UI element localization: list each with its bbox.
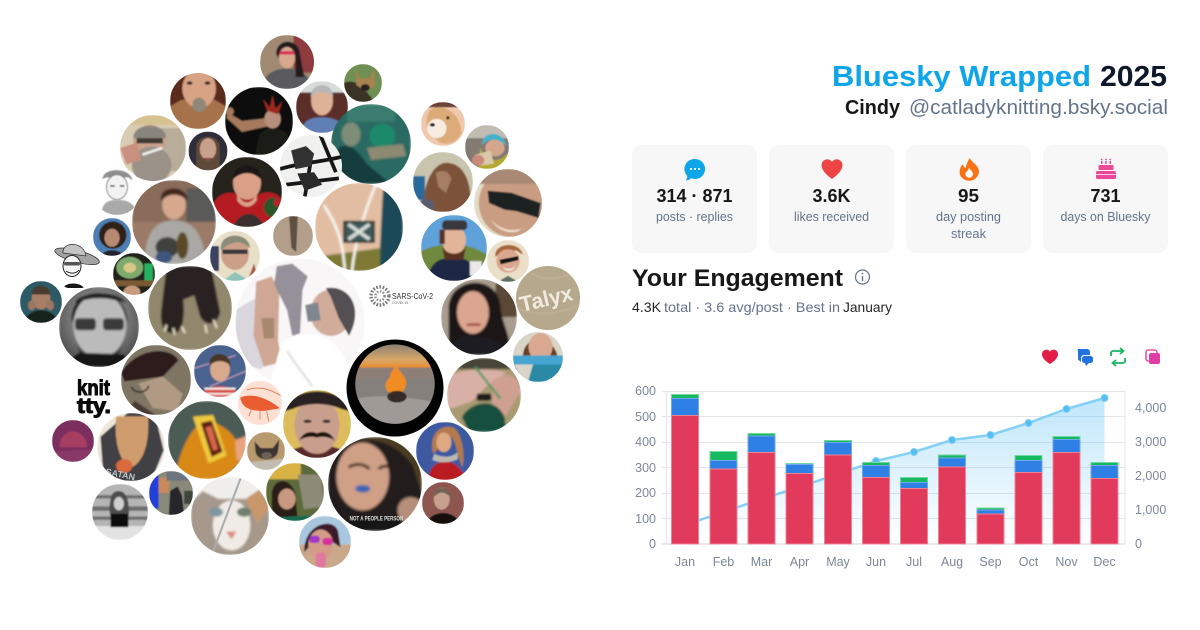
bar: Oct	[1015, 456, 1042, 544]
title: Bluesky Wrapped	[832, 61, 1091, 93]
left axis labels: 600	[635, 384, 656, 398]
legend icons	[1042, 348, 1160, 366]
right axis labels: 4,000	[1135, 401, 1166, 415]
right axis labels: 3,000	[1135, 435, 1166, 449]
panel: likes received	[769, 145, 894, 253]
avatar: knitty logo: knit	[77, 377, 110, 400]
month labels: May	[826, 555, 851, 569]
panel: posts and replies	[632, 145, 757, 253]
stat value: 314 · 871	[656, 186, 732, 206]
right axis labels: 1,000	[1135, 503, 1166, 517]
avatar: long wavy hair	[413, 152, 473, 212]
avatar: roaring cartoon lion	[168, 401, 246, 479]
icon: info	[856, 270, 870, 284]
user name and handle: Cindy	[845, 97, 901, 119]
right axis labels	[1135, 401, 1166, 551]
avatar: woman with glasses	[210, 231, 260, 281]
stat value: 3.6K	[812, 186, 850, 206]
avatar: punk with red mohawk	[225, 87, 293, 155]
month labels: Nov	[1055, 555, 1078, 569]
month labels: Oct	[1019, 555, 1039, 569]
avatar: Talyx logo: Talyx	[517, 280, 575, 317]
month labels: Jan	[675, 555, 695, 569]
avatar: beige knit	[273, 216, 313, 256]
avatar: curly haired woman	[93, 218, 131, 256]
avatar: french bulldog	[247, 432, 285, 470]
avatar: woman with red glasses	[260, 35, 315, 89]
avatar: german shepherd	[344, 64, 382, 102]
cumulative dots	[872, 394, 1108, 464]
icon: reposts arrows	[1111, 348, 1125, 366]
left axis labels	[635, 384, 656, 551]
stat value: 95	[958, 186, 979, 206]
avatar: man with drawn moustache	[283, 390, 351, 458]
avatar: woman with blue lips	[328, 437, 424, 531]
right axis labels: 0	[1135, 537, 1142, 551]
avatar: knitty logo	[77, 377, 111, 418]
avatar: man in dark sweater	[20, 281, 62, 323]
avatar: man with sphynx cat	[236, 258, 364, 388]
avatar: black sunglasses smile	[474, 169, 544, 237]
avatar: small woman on rose background	[422, 482, 464, 524]
avatar: SARS-CoV-2 logo	[371, 287, 433, 305]
month labels: Apr	[790, 555, 809, 569]
avatar cloud	[20, 35, 580, 568]
avatar: woman kissing	[266, 463, 324, 521]
avatar: bearded man with toothbrush	[120, 115, 186, 184]
engagement summary: 4.3K	[632, 299, 662, 315]
y axis grid	[662, 391, 1125, 544]
cumulative line	[685, 398, 1104, 525]
avatar: necklace on skin	[315, 183, 403, 271]
bar: Mar	[748, 434, 775, 544]
icon: heart	[822, 159, 842, 179]
avatar: Talyx logo	[516, 266, 580, 330]
icon: likes heart	[1042, 350, 1058, 364]
avatar: shrimp illustration	[238, 381, 282, 425]
avatar: reflective sunglasses and tongue	[299, 516, 351, 568]
left axis labels: 0	[649, 537, 656, 551]
icon: birthday cake	[1096, 159, 1116, 179]
avatar: heraldic lion crest	[280, 135, 342, 197]
avatar: purple knit hat	[52, 420, 94, 462]
month labels: Mar	[751, 555, 772, 569]
bar: Apr	[786, 464, 813, 544]
engagement summary	[632, 299, 892, 315]
avatar: cat face with knitting needle	[191, 469, 269, 555]
month labels: Feb	[713, 555, 734, 569]
chart: monthly engagement stacked bars with cumulative line	[635, 384, 1166, 569]
month labels	[675, 555, 1116, 569]
avatar: crowd in store	[149, 471, 193, 515]
left axis labels: 500	[635, 410, 656, 424]
avatar: beach bonfire	[346, 340, 444, 436]
avatar: George Takei	[296, 81, 348, 133]
right axis labels: 2,000	[1135, 469, 1166, 483]
left axis labels: 400	[635, 435, 656, 449]
engagement summary: total · 3.6 avg/post · Best in	[664, 299, 840, 315]
avatar: black and white woman	[92, 484, 148, 540]
month labels: Sep	[979, 555, 1002, 569]
avatar: cartoon in hat	[54, 244, 100, 288]
icon: quotes squares	[1146, 350, 1160, 364]
avatar: cat paws	[148, 266, 232, 350]
panel: days on Bluesky	[1043, 145, 1168, 253]
left axis labels: 300	[635, 461, 656, 475]
month labels: Aug	[941, 555, 963, 569]
avatar: young woman long hair	[188, 132, 228, 170]
bar: Aug	[938, 455, 966, 544]
left axis labels: 100	[635, 512, 656, 526]
cumulative area	[685, 398, 1104, 544]
left axis labels: 200	[635, 486, 656, 500]
avatar: knitty logo: tty.	[77, 395, 111, 418]
avatar: blue hair with coffee	[465, 125, 509, 169]
avatar: yarn label and hat	[113, 253, 155, 298]
panel: day posting streak	[906, 145, 1031, 253]
avatar: woman in red dress	[212, 157, 283, 227]
avatar: golden retriever	[421, 102, 465, 146]
avatar: knitting hands green	[447, 358, 521, 432]
avatar: woman in black glasses	[487, 240, 529, 282]
avatar: long beard over band shirt: SATAN	[105, 466, 136, 482]
bar: Sep	[977, 508, 1004, 544]
bar: Dec	[1091, 462, 1118, 544]
stat label: days on Bluesky	[1060, 210, 1151, 224]
avatar: cartoon bearded man	[421, 215, 487, 281]
icon: chat bubble	[684, 159, 705, 180]
avatar: woman with blue lips: NOT A PEOPLE PERSON	[350, 516, 403, 523]
avatar: pencil sketch portrait	[102, 170, 136, 215]
avatar: green tinted group	[331, 104, 411, 184]
bar: Feb	[710, 452, 737, 544]
bar: Jun	[862, 462, 890, 544]
title: 2025	[1100, 61, 1167, 93]
avatar: man with goatee	[170, 69, 226, 129]
stat label: likes received	[794, 210, 869, 224]
icon: replies bubbles	[1078, 349, 1093, 366]
heading: Your Engagement: Your Engagement	[632, 265, 843, 292]
bars	[672, 394, 1118, 544]
stat value: 731	[1090, 186, 1120, 206]
icon: flame	[960, 158, 979, 181]
avatar: black and white man in glasses	[59, 287, 139, 367]
stat label	[936, 210, 1001, 241]
bar: Nov	[1053, 436, 1080, 544]
avatar: dark haired woman	[441, 279, 517, 355]
bar: May	[824, 440, 852, 544]
month labels: Jun	[866, 555, 886, 569]
avatar: long beard over band shirt	[97, 413, 165, 482]
bar: Jan	[672, 394, 698, 544]
stat label: posts · replies	[656, 210, 733, 224]
month labels: Dec	[1093, 555, 1116, 569]
stat label: streak	[951, 227, 987, 241]
avatar: illustrated woman in red	[416, 422, 474, 480]
month labels: Jul	[906, 555, 922, 569]
user name and handle: @catladyknitting.bsky.social	[909, 97, 1168, 119]
bar: Jul	[900, 478, 928, 544]
avatar: SARS-CoV-2 logo: SARS-CoV-2	[392, 291, 433, 301]
avatar: man in cap woven portrait	[121, 345, 191, 415]
avatar: blue knit smiling woman	[513, 332, 563, 382]
avatar: SARS-CoV-2 logo: COVID-19	[392, 301, 408, 305]
engagement summary: January	[843, 299, 892, 315]
avatar: boy school photo	[194, 345, 246, 397]
avatar: woman in grey sweater with yarn	[132, 180, 216, 264]
stat label: day posting	[936, 210, 1001, 224]
